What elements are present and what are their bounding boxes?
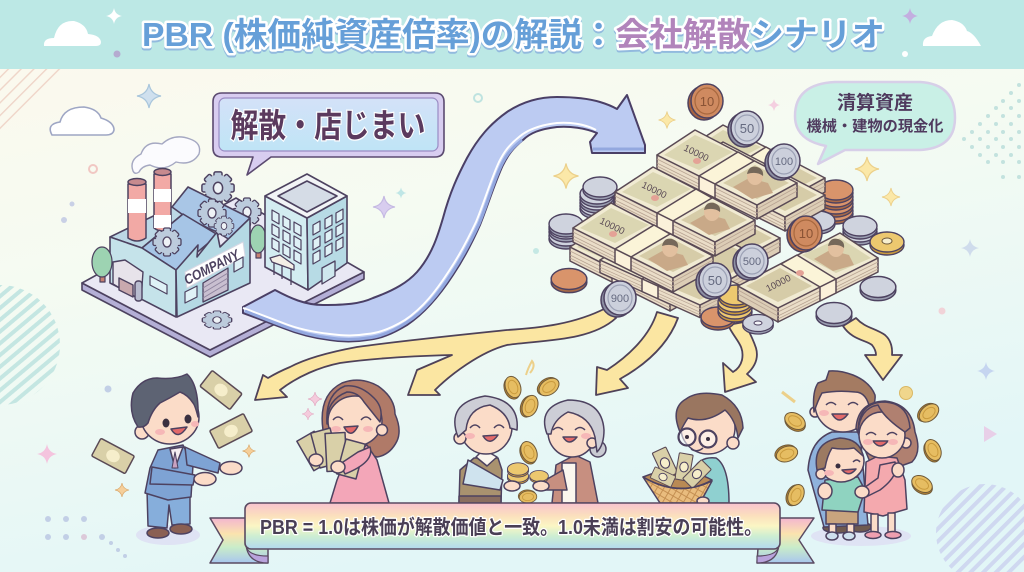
money pile	[549, 84, 904, 334]
icon: falling coins	[501, 361, 562, 504]
banner ribbon	[210, 503, 814, 563]
banknote stack 3	[573, 203, 713, 292]
banknote stack 4: 10000	[764, 273, 793, 295]
left ribbon tail	[210, 518, 268, 563]
father	[823, 523, 853, 533]
labelled coin 10 right	[787, 216, 822, 252]
banknote stack 2	[615, 167, 755, 256]
person: executive	[131, 374, 242, 545]
banknote stack 4	[738, 233, 878, 322]
coin stacks behind	[549, 177, 904, 255]
head	[135, 425, 149, 439]
header band	[0, 0, 1024, 69]
banknote stack 1: 10000	[682, 143, 710, 164]
coins in centre	[701, 285, 773, 334]
woman	[590, 441, 606, 457]
decoration: dotted pattern	[962, 83, 1021, 179]
labelled coin 900	[601, 281, 636, 317]
icon: smoke cloud	[132, 137, 200, 173]
decoration: scattered sparkles and dots	[37, 84, 997, 464]
legs	[147, 490, 190, 528]
arrow rim	[243, 123, 596, 335]
icon: family coins	[773, 386, 945, 509]
right ribbon tail	[757, 518, 814, 563]
icon: ground gear	[202, 311, 232, 329]
icon: floating bills	[92, 370, 322, 497]
speech bubble: dissolution	[213, 93, 444, 175]
banknote stack 3: 10000	[598, 216, 626, 237]
big blue arrow	[243, 95, 645, 342]
decoration: striped half circle	[0, 285, 60, 405]
labelled coin 900: 900	[611, 293, 629, 305]
fan of bills	[297, 428, 365, 479]
icon: gears middle	[153, 199, 234, 256]
person: investor with basket	[643, 393, 743, 505]
labelled coin 50: 50	[708, 273, 722, 288]
speech bubble: liquidation assets	[795, 82, 955, 164]
child	[826, 510, 858, 524]
office windows	[272, 209, 343, 264]
icon: tree front	[92, 247, 112, 282]
icon: tree back	[250, 225, 266, 258]
speech bubble: dissolution: 解散・店じまい	[230, 107, 426, 144]
office building	[265, 174, 347, 290]
person: woman with bills	[297, 380, 399, 503]
labelled coin 500	[733, 244, 768, 280]
decoration: corner stripes	[0, 69, 62, 135]
labelled coin 500: 500	[743, 256, 761, 268]
mother's arm	[861, 462, 896, 497]
icon: gears on roof	[202, 172, 261, 226]
decoration: striped circle	[936, 484, 1024, 572]
mother	[856, 401, 918, 467]
speech bubble: liquidation assets: 機械・建物の現金化	[806, 117, 944, 135]
banknote stack 1	[657, 130, 797, 219]
labelled coin 10 right: 10	[799, 226, 813, 241]
company sign: COMPANY	[181, 246, 243, 288]
lower banknote stacks	[570, 125, 825, 318]
arrow to seniors	[596, 312, 678, 395]
decoration: bottom-left dots	[45, 386, 127, 558]
labelled coin 50 top: 50	[740, 121, 754, 136]
banner body	[245, 503, 780, 549]
factory windows	[150, 257, 243, 303]
labelled coin 10 top	[688, 84, 723, 120]
icon: header cloud left	[44, 21, 101, 46]
factory and office on platform	[82, 137, 364, 357]
title: PBR (株価純資産倍率)の解説： 会社解散シナリオ	[142, 16, 885, 53]
arrow to family	[843, 318, 902, 380]
arrows to executive and shareholder	[255, 308, 616, 400]
labelled coin 10 top: 10	[700, 94, 714, 109]
factory roofs and walls	[110, 187, 250, 317]
coins in hands	[507, 470, 529, 484]
person: elderly couple	[454, 396, 606, 503]
icon: chimneys	[128, 168, 171, 241]
labelled coin 50	[696, 263, 731, 299]
loose coins	[551, 268, 896, 327]
arrow underside	[245, 140, 644, 340]
arrow to investor	[723, 322, 757, 392]
yellow arrows	[255, 308, 902, 400]
speech bubble: liquidation assets: 清算資産	[837, 91, 913, 114]
labelled coin 50 top	[728, 111, 763, 147]
icon: outlined cloud	[50, 107, 114, 135]
banner text: PBR = 1.0は株価が解散価値と一致。1.0未満は割安の可能性。	[260, 515, 762, 539]
header sparkles	[106, 8, 918, 58]
basket	[643, 470, 712, 488]
platform	[82, 198, 364, 357]
entrance canopy	[113, 260, 143, 301]
suit jacket	[145, 445, 193, 500]
icon: header cloud right	[923, 20, 981, 46]
labelled coin 100: 100	[775, 156, 793, 168]
banknote stack 2: 10000	[640, 180, 668, 201]
office door and canopy	[270, 255, 335, 285]
labelled coin 100	[765, 144, 800, 180]
arms	[185, 447, 220, 473]
man	[459, 458, 502, 503]
shutter door	[203, 268, 228, 302]
person: family	[808, 371, 918, 546]
